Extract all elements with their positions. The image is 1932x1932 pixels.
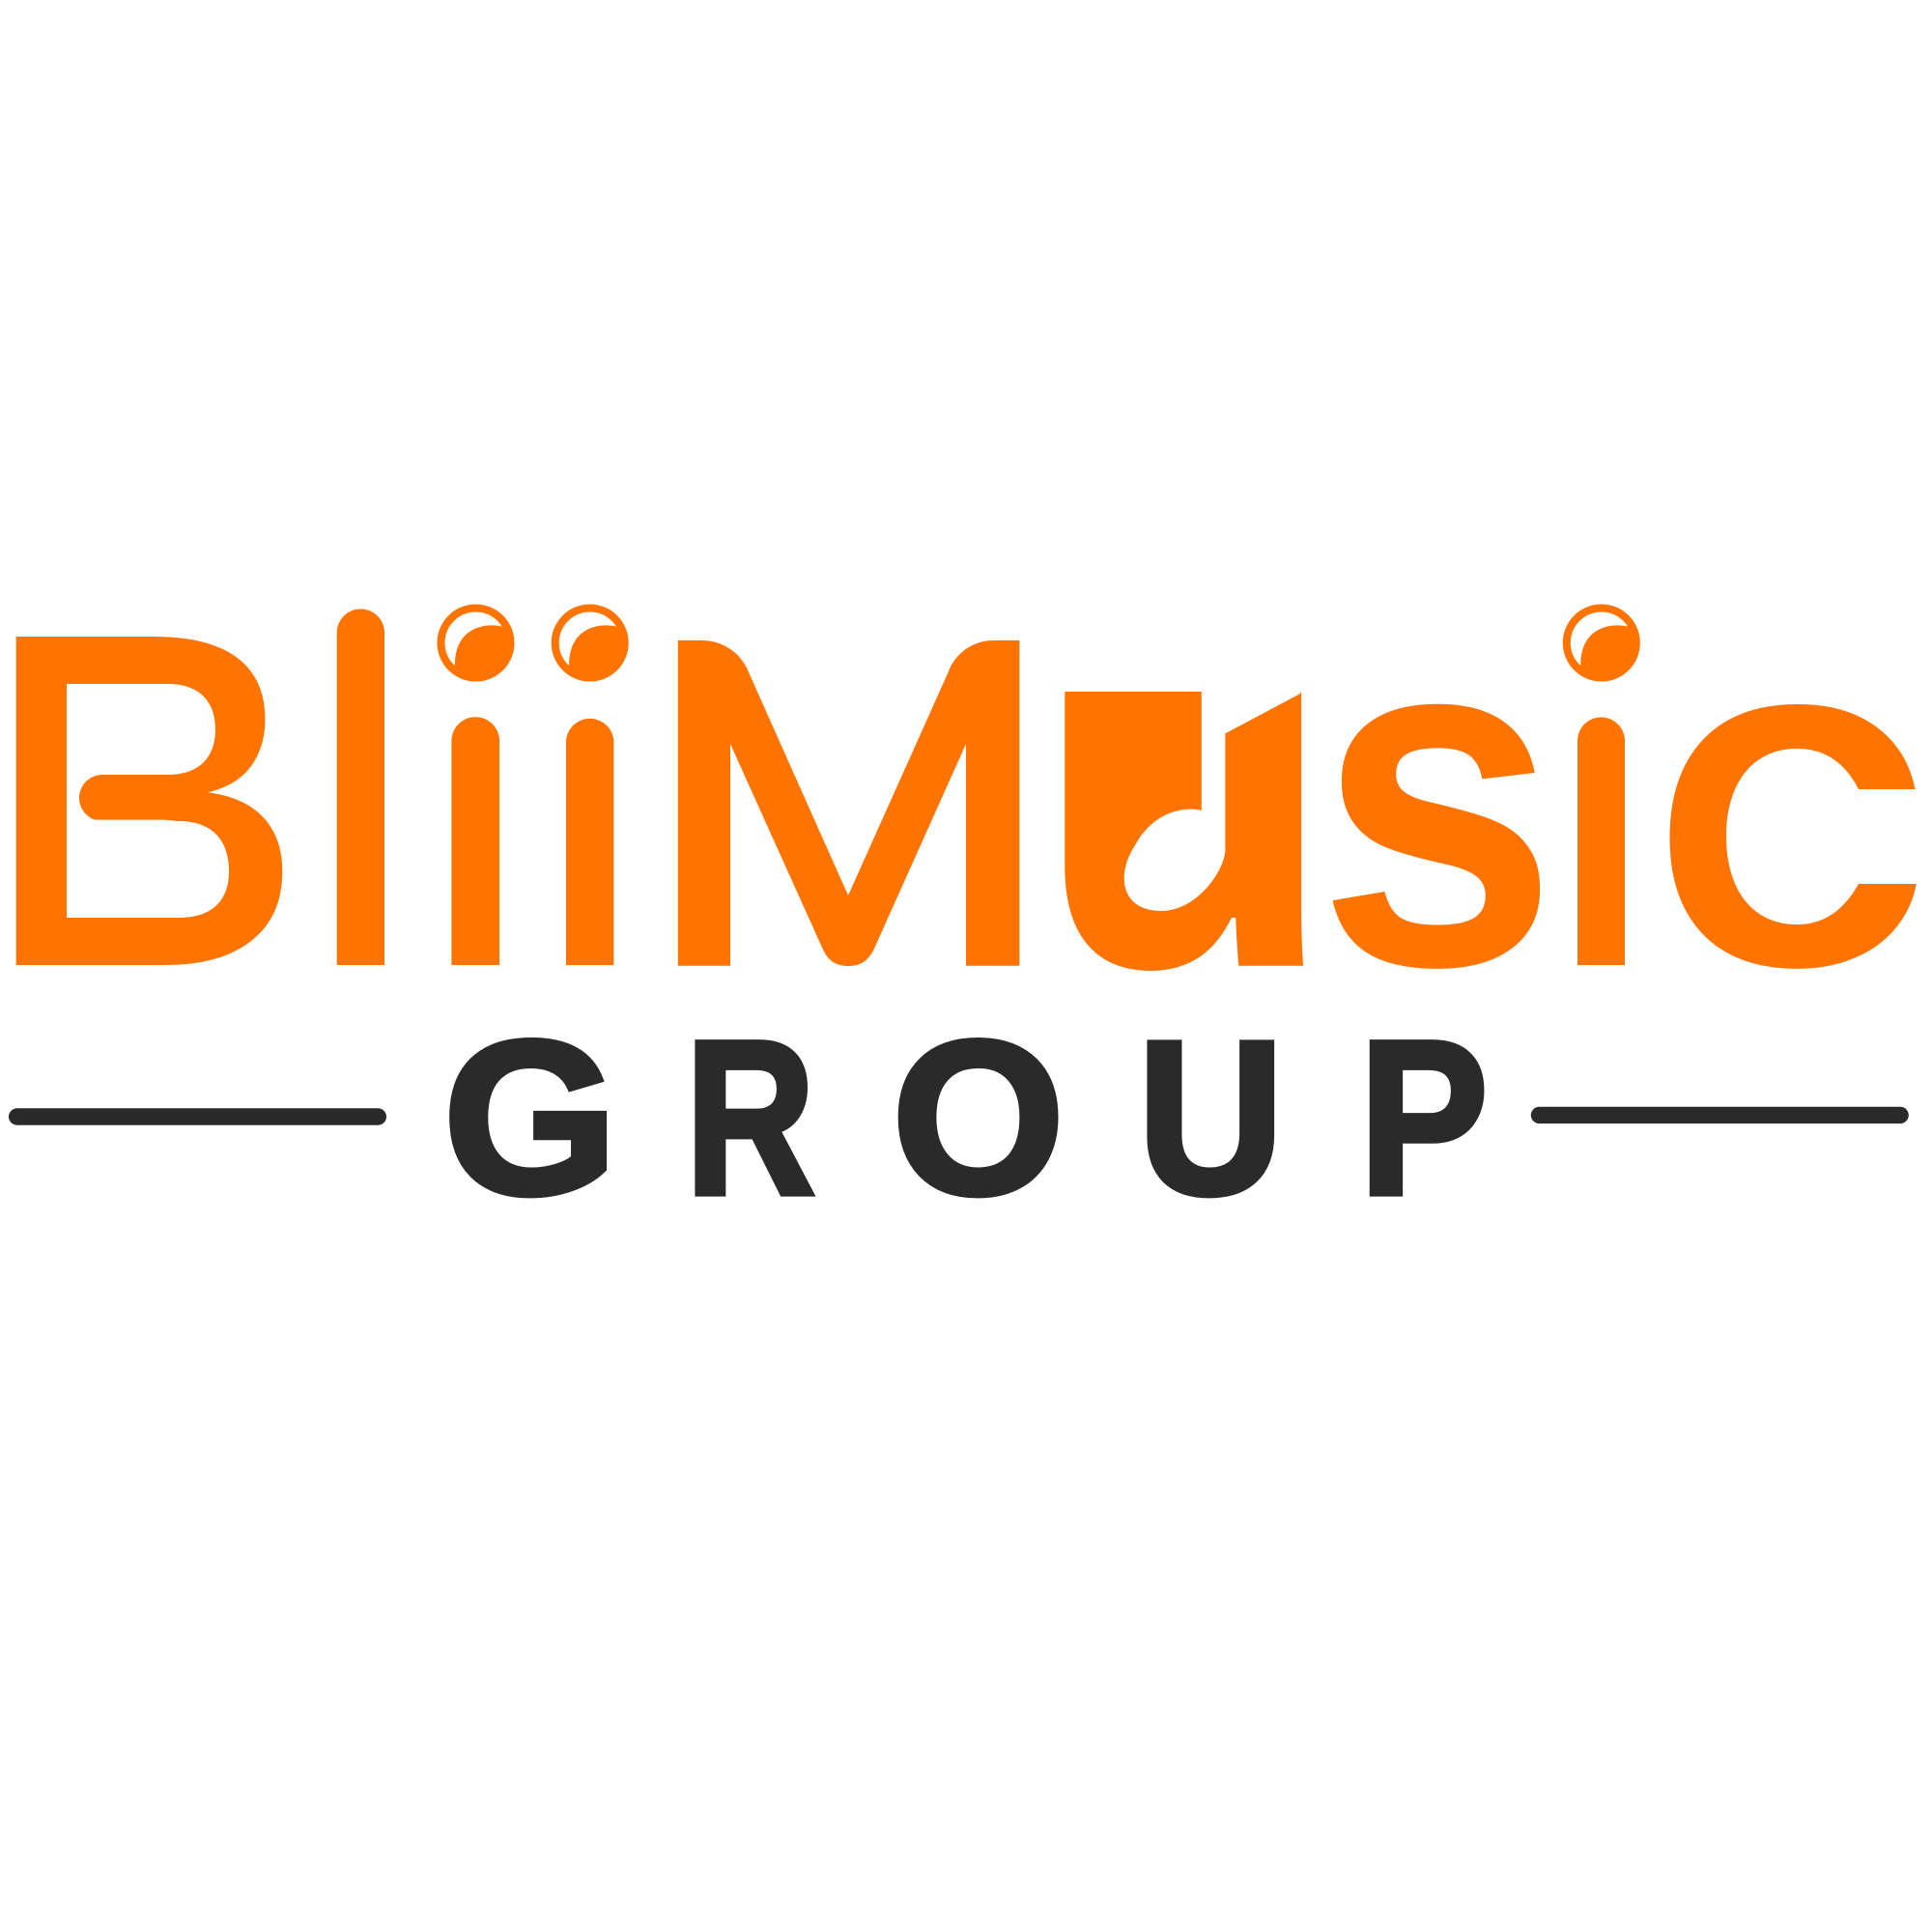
icon: orb dot of third i (1567, 609, 1636, 678)
letter M: M (645, 540, 1052, 1069)
letter l: l (309, 513, 412, 1075)
letter i, third: i (1550, 535, 1652, 1070)
icon: orb dot of first i (440, 609, 511, 678)
subtitle: GROUP: P (1359, 996, 1488, 1241)
subtitle: GROUP (443, 996, 1488, 1241)
right rule line (1531, 1107, 1909, 1123)
left rule line (9, 1108, 386, 1125)
letter s: s (1318, 529, 1557, 1070)
letter i, first: i (424, 535, 526, 1070)
logo wordmark: BliiMusic (0, 498, 1932, 1080)
subtitle: GROUP: O (893, 997, 1065, 1241)
subtitle: GROUP: G (443, 997, 617, 1241)
subtitle: GROUP: R (686, 996, 815, 1241)
icon: orb dot of second i (555, 609, 625, 678)
letter u with music note cutout: u (1035, 498, 1336, 1080)
subtitle: GROUP: U (1138, 997, 1284, 1241)
letter c: c (1650, 529, 1932, 1070)
letter i, second: i (539, 535, 640, 1070)
icon: music note negative space (1121, 688, 1300, 918)
